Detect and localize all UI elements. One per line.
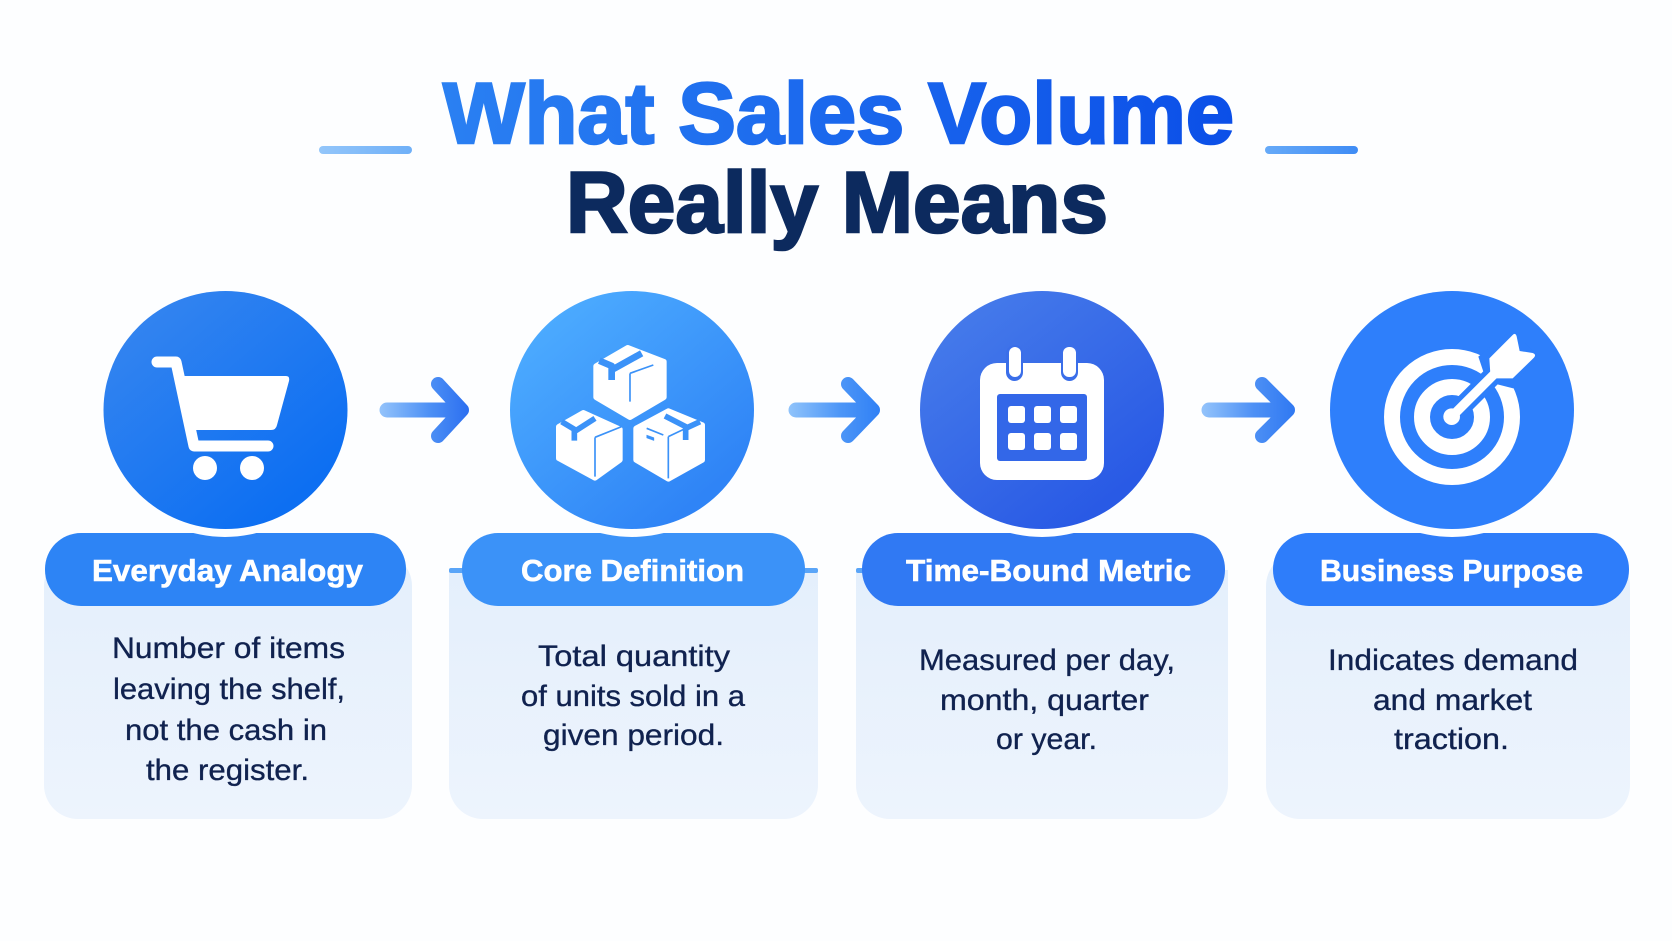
pill heading: Everyday Analogy [92,553,364,588]
card [1266,552,1630,819]
icon: target with arrow [1330,291,1574,529]
description: not the cash in [125,714,327,747]
card [449,570,818,819]
panel: core definition [449,283,818,819]
icon: shopping cart [104,291,348,529]
description: the register. [146,754,309,787]
description: or year. [996,723,1097,756]
pill heading [462,533,805,606]
left title accent bar [319,146,412,154]
arrow: step 1 to step 2 [387,384,462,436]
pill heading: Time-Bound Metric [906,553,1191,588]
panel: everyday analogy [44,283,412,819]
pill heading [45,533,406,606]
description: Measured per day, [919,644,1175,677]
pill heading [862,533,1225,606]
panel: time-bound metric [856,283,1228,819]
title line 2: Really Means [566,155,1108,251]
description: Total quantity [538,640,730,673]
description: given period. [543,719,724,752]
description: Indicates demand [1328,644,1578,677]
arrow: step 3 to step 4 [1209,384,1288,436]
card [44,552,412,819]
description: of units sold in a [521,680,745,713]
pill heading: Core Definition [521,553,744,588]
title line 1: What Sales Volume [443,66,1234,162]
icon: stacked boxes [510,291,754,529]
description: Number of items [112,632,345,665]
description [521,640,745,752]
description [1328,644,1578,756]
card [856,570,1228,819]
description: leaving the shelf, [113,673,345,706]
description: and market [1373,684,1533,717]
pill heading [1273,533,1629,606]
title [443,66,1234,251]
pill heading: Business Purpose [1320,553,1583,588]
description: month, quarter [940,684,1149,717]
panel: business purpose [1266,283,1630,819]
description [112,632,345,787]
right title accent bar [1265,146,1358,154]
description [919,644,1175,756]
description: traction. [1394,723,1509,756]
icon: calendar [920,291,1164,529]
arrow: step 2 to step 3 [796,384,873,436]
